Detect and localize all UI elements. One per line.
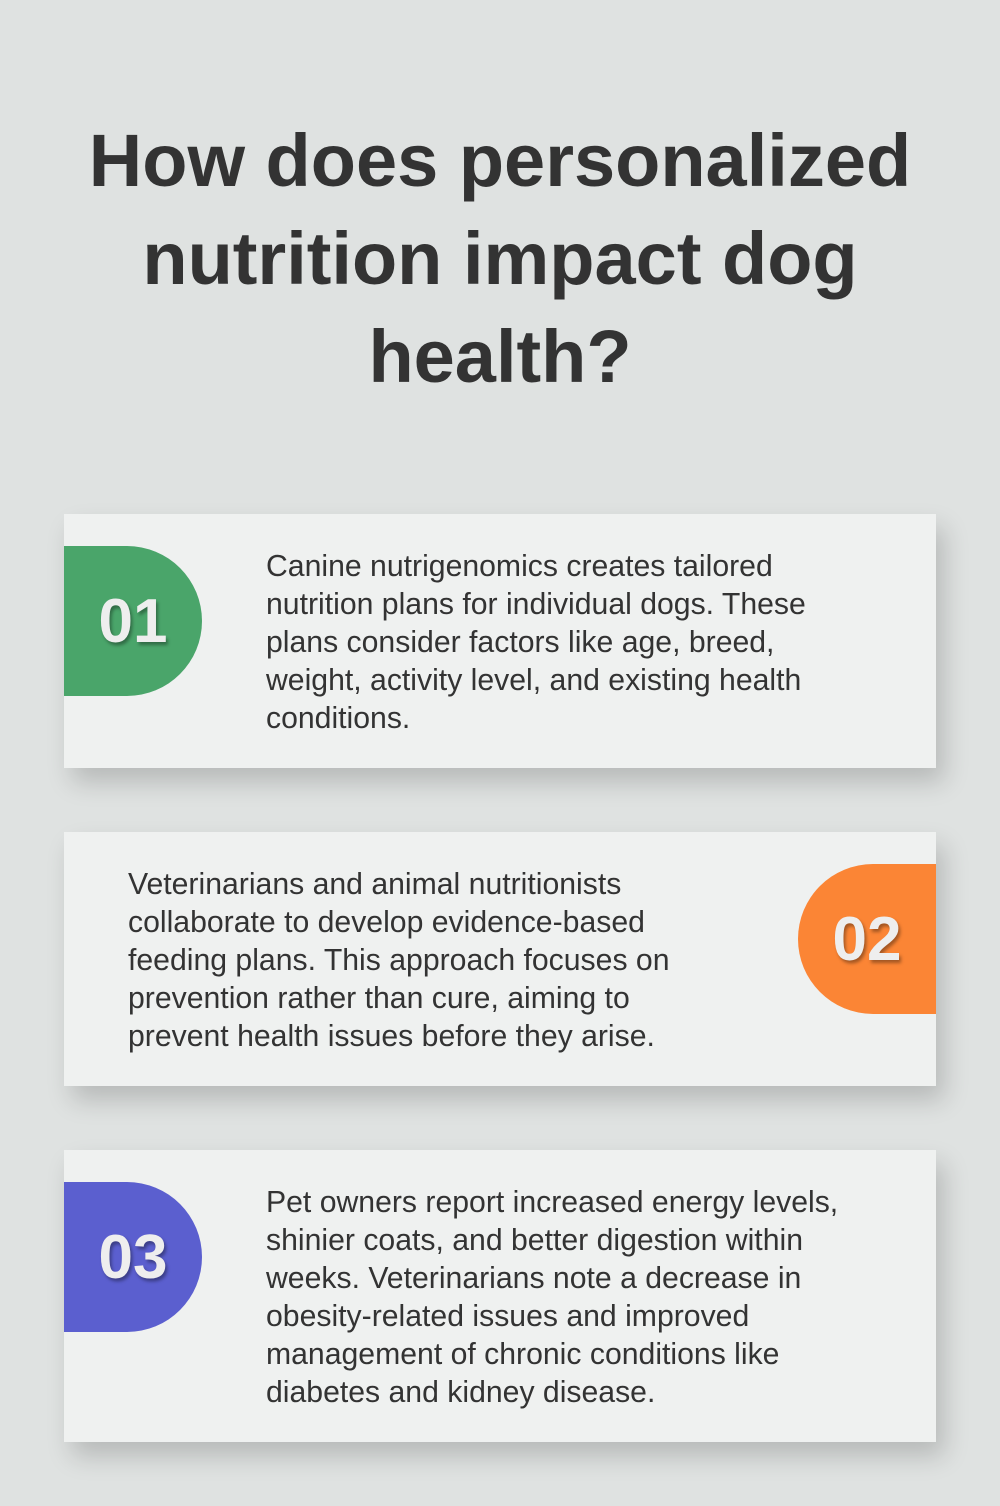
text block 02: feeding plans. This approach focuses on [128,944,670,977]
title [89,119,911,398]
badge 02: 02 [833,904,901,974]
badge 01: 01 [99,586,167,656]
panel: card 02 [64,832,936,1086]
text block 01: weight, activity level, and existing health [266,664,801,697]
text block 02: prevent health issues before they arise. [128,1020,655,1053]
title: health? [368,315,632,398]
text block 01: plans consider factors like age, breed, [266,626,774,659]
panel: card 01 [64,514,936,768]
badge 03: 03 [99,1222,167,1292]
text block 03: diabetes and kidney disease. [266,1376,655,1409]
text block 03: obesity-related issues and improved [266,1300,749,1333]
title: nutrition impact dog [142,217,858,300]
text block 02: collaborate to develop evidence-based [128,906,645,939]
text block 01 [266,550,806,735]
badge 02 [798,864,936,1014]
text block 03 [266,1186,838,1409]
text block 03: shinier coats, and better digestion within [266,1224,803,1257]
text block 01: nutrition plans for individual dogs. These [266,588,806,621]
text block 03: Pet owners report increased energy levels, [266,1186,838,1219]
text block 02: prevention rather than cure, aiming to [128,982,630,1015]
text block 01: Canine nutrigenomics creates tailored [266,550,773,583]
text block 02 [128,868,670,1053]
badge 03 [64,1182,202,1332]
text block 01: conditions. [266,702,410,735]
badge 01 [64,546,202,696]
title: How does personalized [89,119,911,202]
text block 03: management of chronic conditions like [266,1338,779,1371]
text block 02: Veterinarians and animal nutritionists [128,868,621,901]
panel: card 03 [64,1150,936,1442]
text block 03: weeks. Veterinarians note a decrease in [266,1262,801,1295]
